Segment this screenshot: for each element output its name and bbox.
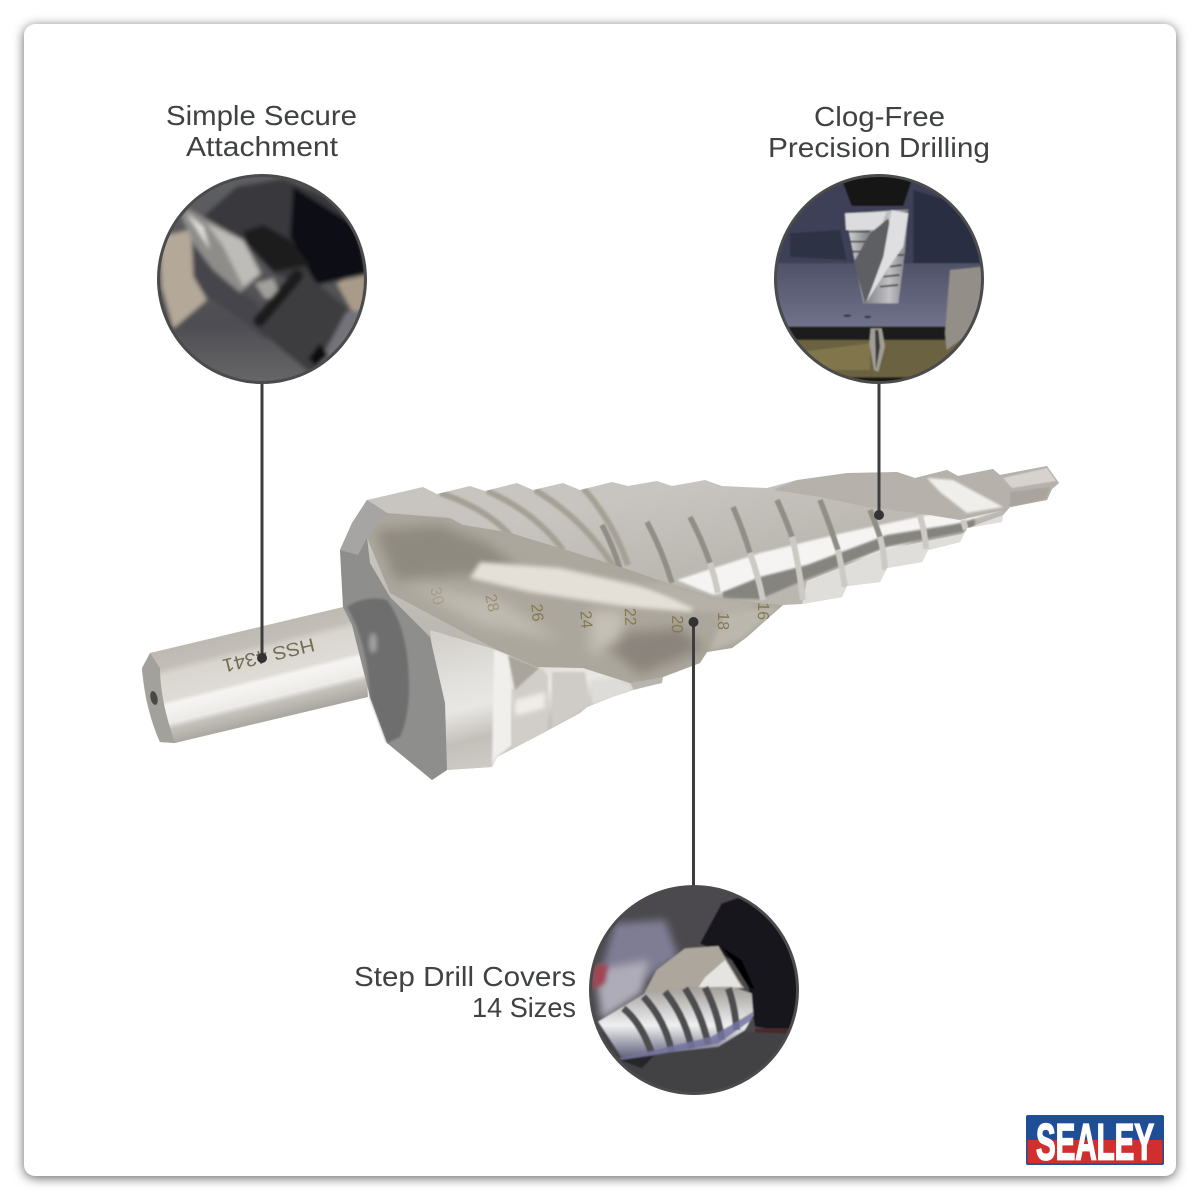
leader line 2	[874, 380, 884, 520]
engraved sizes on flute: 16	[754, 602, 771, 620]
drill shank	[142, 607, 368, 743]
heading: simple secure attachment: Attachment	[186, 131, 338, 162]
engraved sizes on flute: 20	[668, 615, 685, 633]
engraved sizes on flute: 22	[621, 608, 638, 626]
flange	[340, 500, 447, 780]
leader line 1	[257, 380, 267, 663]
engraved sizes on flute	[426, 586, 771, 633]
spiral flute	[367, 513, 783, 683]
heading: step drill covers 14 sizes	[354, 961, 576, 1023]
step ridges: dark upper part	[602, 500, 880, 583]
step ridges: light lower part	[710, 516, 966, 600]
engraved sizes on flute: 30	[426, 586, 447, 607]
engraved text on shank: HSS 4341	[220, 633, 316, 676]
heading: simple secure attachment	[166, 100, 357, 162]
callout: step drill covers 14 sizes	[354, 617, 805, 1100]
photo circle: gloved hands fitting drill to chuck	[150, 170, 370, 390]
engraved sizes on flute: 24	[576, 610, 595, 629]
heading: step drill covers 14 sizes: 14 Sizes	[472, 992, 576, 1023]
heading: clog-free precision drilling	[768, 101, 990, 163]
highlight band	[677, 503, 1000, 595]
engraved sizes on flute: 28	[481, 593, 502, 614]
step ridges: left	[440, 488, 628, 570]
heading: clog-free precision drilling: Clog-Free	[814, 101, 945, 132]
photo circle: step drill close-up	[585, 880, 805, 1100]
photo circle: drilling through steel plate	[770, 170, 990, 391]
heading: simple secure attachment: Simple Secure	[166, 100, 357, 131]
heading: clog-free precision drilling: Precision Drilling	[768, 132, 990, 163]
engraved sizes on flute: 26	[527, 603, 546, 622]
under-highlight dark band	[723, 519, 975, 599]
lower body below flute	[430, 630, 640, 770]
infographic artwork	[142, 105, 1164, 1165]
leader line 3	[688, 617, 698, 889]
tip flute	[773, 466, 1059, 520]
lower light band	[802, 515, 1003, 604]
callout: clog-free precision drilling	[768, 101, 990, 520]
stepped body	[340, 466, 1059, 780]
engraved sizes on flute: 18	[714, 612, 731, 630]
callout: simple secure attachment	[150, 100, 370, 663]
drill bit product photo	[142, 466, 1059, 780]
heading: step drill covers 14 sizes: Step Drill Covers	[354, 961, 576, 992]
